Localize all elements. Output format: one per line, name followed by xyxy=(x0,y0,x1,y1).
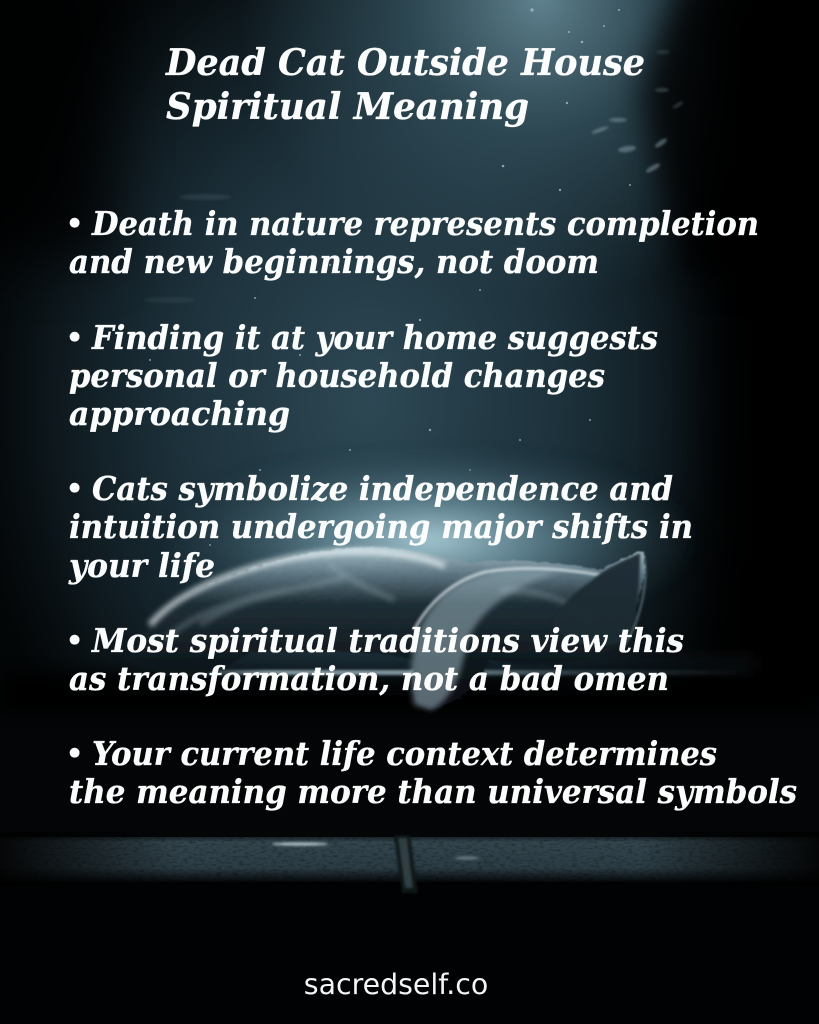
footer website: sacredself.co xyxy=(304,968,488,1001)
bullet: death in nature: and new beginnings, not doom xyxy=(69,242,599,281)
bullet: finding it at your home xyxy=(66,318,658,433)
title: Dead Cat Outside House xyxy=(165,42,645,84)
bullet: life context: • xyxy=(66,739,83,770)
dust particles xyxy=(149,8,631,546)
bullet: finding it at your home: approaching xyxy=(69,394,290,433)
bullet: spiritual traditions: as transformation, not a bad omen xyxy=(69,659,669,698)
bullet: death in nature: • xyxy=(66,209,83,240)
cat glow xyxy=(130,455,750,645)
ledge under the cat xyxy=(130,656,755,675)
foliage: top-right leaves xyxy=(144,50,684,303)
cat head shadow xyxy=(552,553,640,646)
bullet: cats symbolize: your life xyxy=(68,546,215,585)
title: Spiritual Meaning xyxy=(166,86,529,128)
bullet: death in nature: Death in nature represents completion xyxy=(91,204,759,243)
bullet: cats symbolize: • xyxy=(66,474,83,505)
bullet: spiritual traditions: • xyxy=(66,626,83,657)
bullet: life context xyxy=(66,734,797,811)
cat fur streaks xyxy=(165,565,590,640)
bullet: finding it at your home: • xyxy=(66,323,83,354)
bullet: spiritual traditions: Most spiritual traditions view this xyxy=(91,621,684,660)
bullet: finding it at your home: personal or household changes xyxy=(69,356,605,395)
bullet: cats symbolize xyxy=(66,469,693,585)
bullet: cats symbolize: intuition undergoing major shifts in xyxy=(69,507,693,546)
cat foreleg xyxy=(411,570,560,710)
bullet: spiritual traditions xyxy=(66,621,684,698)
illustration: sleeping cat xyxy=(128,547,645,710)
bullet: finding it at your home: Finding it at your home suggests xyxy=(91,318,658,357)
title xyxy=(165,42,645,128)
bullet: cats symbolize: Cats symbolize independence and xyxy=(92,469,673,508)
bullet: life context: Your current life context determines xyxy=(92,734,717,773)
tree silhouette: top right xyxy=(640,0,819,280)
stone ground xyxy=(0,832,819,893)
bullet: death in nature xyxy=(66,204,759,281)
